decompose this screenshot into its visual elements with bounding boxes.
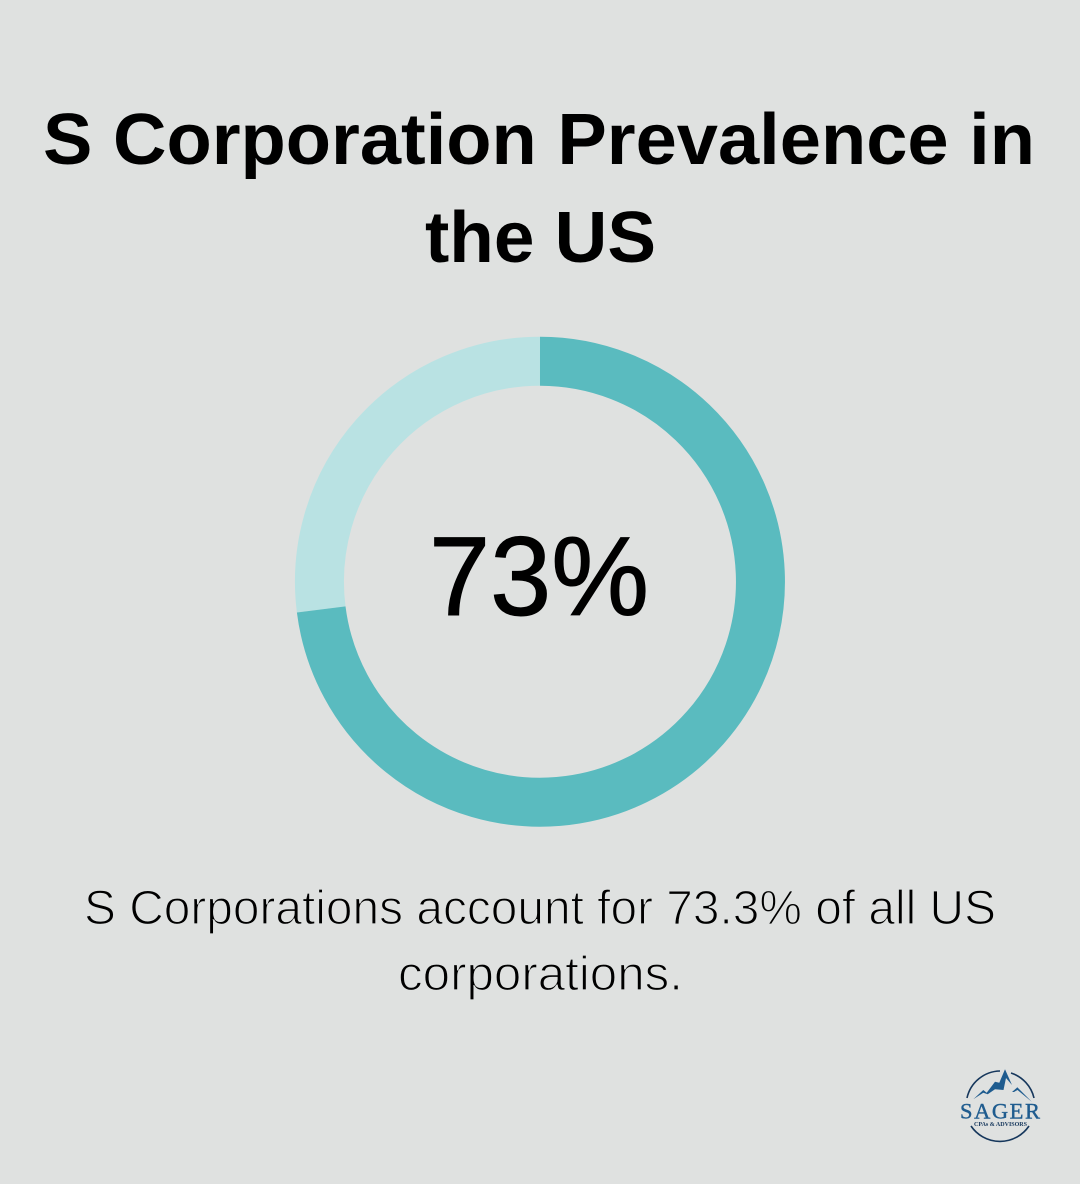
remainder arc bbox=[319, 361, 540, 609]
logo: Sager CPAs & Advisors bbox=[960, 1069, 1040, 1141]
donut chart bbox=[319, 361, 760, 802]
logo ring bbox=[967, 1071, 1000, 1098]
logo wordmark: SAGER bbox=[960, 1098, 1040, 1124]
logo tagline: CPAs & ADVISORS bbox=[974, 1122, 1028, 1128]
center value: 73% bbox=[429, 514, 649, 639]
description text: corporations. bbox=[398, 948, 683, 1001]
description text: S Corporations account for 73.3% of all US bbox=[84, 882, 996, 935]
title bbox=[43, 100, 1035, 278]
logo mountain bbox=[973, 1069, 1012, 1099]
title: S Corporation Prevalence in bbox=[43, 100, 1035, 180]
description text bbox=[84, 882, 996, 1001]
73% arc bbox=[321, 361, 760, 802]
title: the US bbox=[425, 198, 656, 278]
